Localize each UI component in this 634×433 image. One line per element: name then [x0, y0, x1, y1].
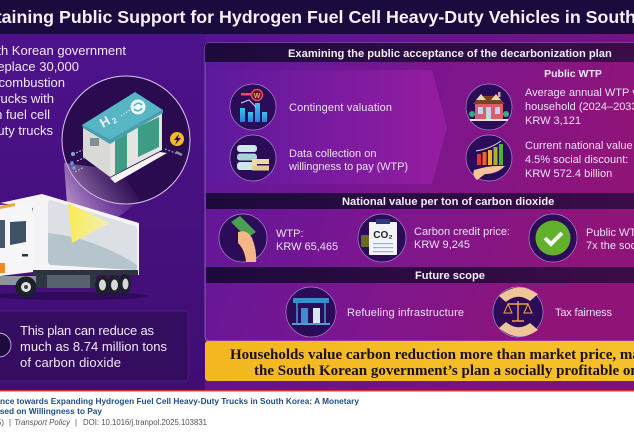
heading: public WTP: Public WTP: [544, 68, 602, 80]
footer rule: [0, 390, 634, 392]
icon: cash in hand: [219, 214, 267, 262]
citation: |: [75, 418, 77, 427]
text: tax fairness: Tax fairness: [555, 307, 612, 319]
icon: growth chart on hand: [466, 135, 512, 181]
text: public WTP multiple: [586, 227, 634, 252]
citation: Transport Policy: [14, 418, 71, 427]
text: national value: 4.5% social discount:: [525, 154, 628, 166]
callout: carbon reduction: much as 8.74 million tons: [20, 339, 168, 354]
icon: contingent valuation: [230, 84, 276, 130]
heading: national value: National value per ton of carbon dioxide: [342, 196, 554, 208]
cargo box: [0, 194, 139, 275]
heading: national value: [206, 193, 634, 209]
heading: future scope: Future scope: [415, 270, 485, 282]
text: carbon credit price: KRW 9,245: [414, 239, 470, 251]
text: contingent valuation: Contingent valuation: [289, 102, 392, 114]
station body: [82, 92, 167, 183]
text: WTP price: KRW 65,465: [276, 241, 338, 253]
icon: check mark: [529, 214, 577, 262]
heading: examining: Examining the public acceptance of the decarbonization plan: [288, 48, 612, 60]
left column shade: [0, 34, 205, 391]
icon: CO2 credit: [358, 214, 406, 262]
icon: house: [466, 84, 512, 130]
station body: H: [97, 113, 113, 131]
citation: |: [9, 418, 11, 427]
text: refueling: Refueling infrastructure: [347, 307, 464, 319]
chassis: [33, 270, 138, 275]
text: national value: KRW 572.4 billion: [525, 168, 612, 180]
callout: carbon reduction: of carbon dioxide: [20, 355, 121, 370]
power symbol: [170, 132, 184, 146]
icon: contingent valuation: W: [254, 93, 261, 100]
heading: examining: [205, 43, 634, 62]
callout: carbon reduction: [0, 311, 188, 381]
icon: refueling station: [286, 287, 336, 337]
icon: carbon circle: [0, 333, 11, 357]
icon: CO2 credit: CO₂: [373, 230, 393, 241]
icon: data collection: [230, 135, 276, 181]
text: household WTP: [525, 87, 634, 127]
text: data collection: willingness to pay (WTP): [288, 161, 408, 173]
text: carbon credit price: [414, 226, 510, 251]
heading: future scope: [206, 267, 634, 283]
text: data collection: Data collection on: [289, 148, 376, 160]
text: data collection: [288, 148, 408, 173]
citation: DOI: 10.1016/j.tranpol.2025.103831: [83, 418, 207, 427]
station body: 2: [110, 115, 119, 126]
text: household WTP: KRW 3,121: [525, 115, 581, 127]
conclusion banner: the South Korean government’s plan a socially profitable one: [254, 363, 634, 379]
ground shadow: [0, 292, 148, 300]
text: WTP price: WTP:: [276, 228, 304, 240]
citation: [0, 396, 359, 427]
conclusion banner: [205, 341, 634, 381]
panel: public acceptance: [205, 43, 634, 341]
intro text block: [0, 43, 126, 138]
text: carbon credit price: Carbon credit price:: [414, 226, 510, 238]
truck illustration: [0, 194, 148, 300]
icon: hydrogen fuel cell station: [62, 76, 190, 222]
hydrogen molecules: [71, 152, 75, 156]
cab: [0, 204, 33, 276]
text: national value: [525, 140, 634, 180]
title bar: [0, 0, 634, 34]
text: WTP price: [276, 228, 338, 253]
icon: scales in hands: [493, 287, 543, 337]
wheels: [16, 274, 131, 298]
callout: carbon reduction: This plan can reduce as: [20, 323, 154, 338]
process arrow: [206, 70, 447, 184]
